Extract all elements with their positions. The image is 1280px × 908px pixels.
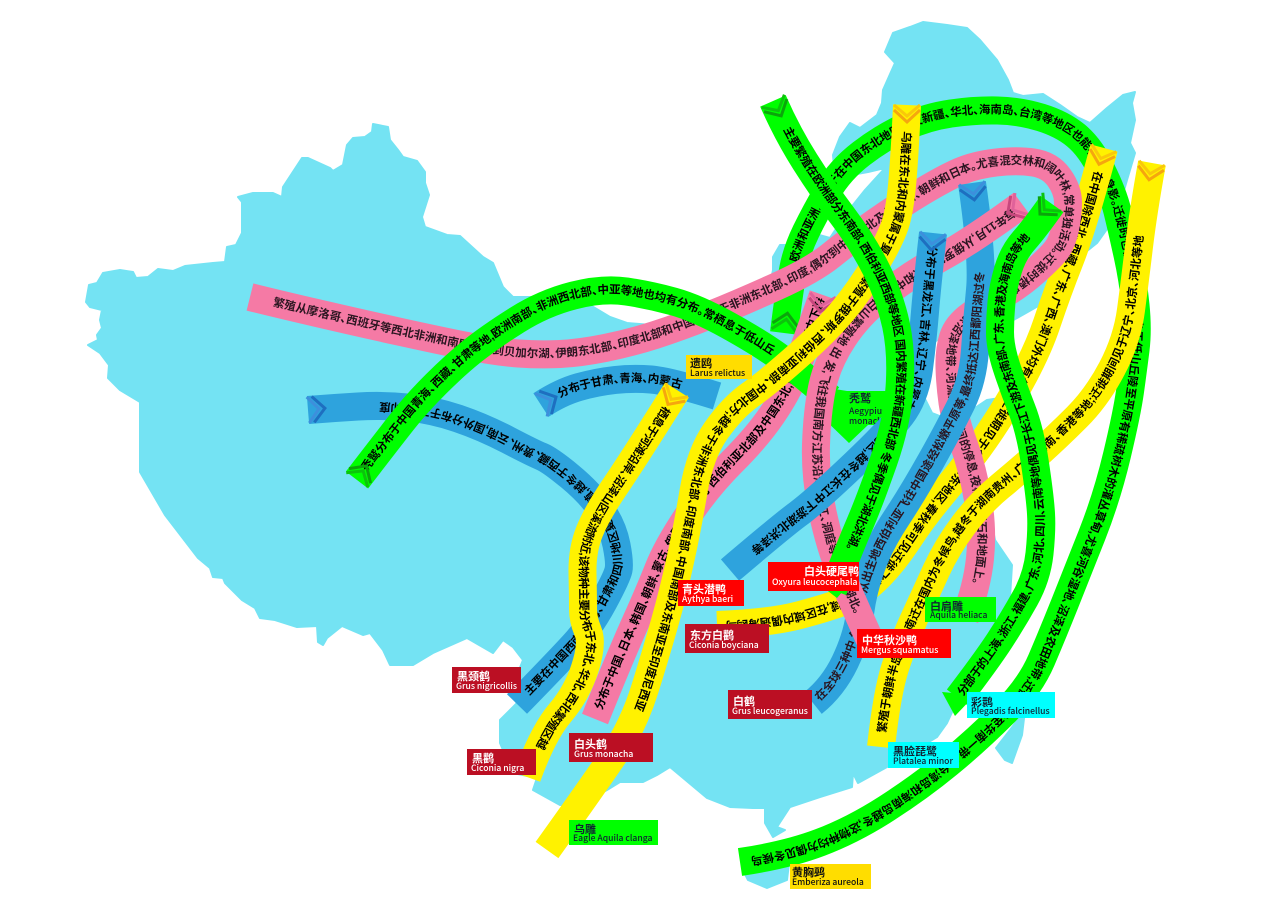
label: Eagle Aquila clanga: 乌雕	[574, 821, 596, 837]
label: Ciconia nigra: 黑鹳	[472, 750, 494, 766]
band: Oxyura leucocephala route	[760, 94, 914, 598]
label: Ciconia boyciana: 东方白鹳	[690, 627, 734, 643]
band: Aegypius monachus route and label	[346, 276, 892, 488]
band: Aythya baeri route: 分布于黑龙江、吉林、辽宁、内蒙古东部等地区,越冬在长江中下游湖北洪泽等	[752, 246, 938, 556]
label: Grus leucogeranus	[728, 690, 812, 719]
band: Aegypius monachus route and label: 秃鹫	[849, 390, 871, 406]
label: Grus monacha: Grus monacha	[574, 748, 633, 760]
label: Aquila heliaca: 白肩雕	[930, 598, 963, 614]
label: Eagle Aquila clanga: Eagle Aquila clanga	[573, 832, 653, 844]
label: Mergus squamatus: Mergus squamatus	[861, 644, 938, 656]
label: Larus relictus: Larus relictus	[690, 367, 745, 379]
band: Emberiza aureola route: 欧洲和亚洲,少见于在中国东北地区以及新疆、华北、海南岛、台湾等地区也能看到其身影。迁徙时也偶见于此常栖息于低山丘陵至平原有稀疏树木的灌丛草甸,尤喜河谷湿地、沼泽及农田地带,迁徙冬季至华南一带,在台湾岛和海南岛越冬,这物种均为偶见冬候鸟	[752, 104, 1144, 866]
band: Oxyura leucocephala route: 主要繁殖在欧洲部分东南部、西伯利亚西部等地区 国内繁殖在新疆西北部 冬季偶见于湖北洪湖。	[783, 126, 908, 548]
band: Aquila clanga route	[536, 104, 921, 858]
label: Plegadis falcinellus	[967, 692, 1055, 718]
label: Oxyura leucocephala	[768, 562, 859, 591]
label: Grus leucogeranus: 白鹤	[733, 693, 755, 709]
band: Aegypius monachus route and label: monachus	[849, 415, 892, 427]
map of China	[86, 22, 1135, 888]
label: Emberiza aureola: Emberiza aureola	[792, 876, 864, 888]
label: Larus relictus	[686, 355, 752, 379]
label: Aquila heliaca	[925, 597, 996, 622]
label: Grus nigricollis: Grus nigricollis	[456, 680, 517, 692]
label: Ciconia boyciana	[685, 624, 769, 653]
band: Larus relictus route: 分布于甘肃、青海、内蒙古	[558, 372, 682, 398]
label: Grus monacha: 白头鹤	[574, 736, 607, 752]
label: Plegadis falcinellus: 彩鹮	[971, 694, 993, 710]
label: Mergus squamatus: 中华秋沙鸭	[862, 632, 917, 648]
label: Ciconia nigra	[467, 749, 536, 775]
label: Aythya baeri	[678, 580, 744, 606]
label: Platalea minor: 黑脸琵鹭	[893, 743, 937, 759]
band: Ciconia boyciana route: 在中国除西北、西藏、广东、广西、澳门外均有分布,迁徙期见于华中华东地区,春秋季可见迁徙飞越长江流域,在区域内偶遇海鸥鸟	[726, 172, 1104, 627]
label: Ciconia boyciana: Ciconia boyciana	[689, 639, 759, 651]
label: Aquila heliaca: Aquila heliaca	[930, 609, 988, 621]
label: Oxyura leucocephala: 白头硬尾鸭	[804, 563, 859, 579]
band: Long pink route: 繁殖从摩洛哥、西班牙等西北非洲和南欧往东到贝加尔湖、伊朗东北部、印度北部和中国;越冬于非洲东北部、印度,偶尔到中国东北及俄罗斯、朝鲜和日本。尤喜混交林和阔叶林,常单独活动。迁徙时栖息于开阔草原沼泽地带、河流湖泊之间的停息,夜栖于岩石和地面上。	[273, 154, 1075, 582]
label: Platalea minor: Platalea minor	[893, 755, 953, 767]
label: Grus monacha	[569, 733, 653, 762]
label: Grus nigricollis	[452, 667, 521, 693]
label: Emberiza aureola: 黄胸鹀	[792, 864, 825, 880]
label: Larus relictus: 遗鸥	[690, 355, 712, 371]
label: Aythya baeri: Aythya baeri	[682, 593, 733, 605]
band: Aegypius monachus route and label: 秃鹫分布于中国青海、西藏、甘肃等地,欧洲南部、非洲西北部、中亚等地也均有分布。常栖息于低山丘	[360, 284, 775, 470]
label: Eagle Aquila clanga	[569, 820, 658, 845]
band: Grus leucogeranus route: 在全球三种中,每年秋季从出生地西伯利亚飞往中国途经松嫩平原等,最终抵达江西鄱阳湖过冬	[814, 272, 985, 701]
band: Ciconia nigra route: 栖息于河滩沿岸、沼泽山区溪流附近,该物种主要分布于东北、华北、西北繁殖区越	[536, 406, 671, 750]
label: Ciconia nigra: Ciconia nigra	[471, 762, 524, 774]
band: Aegypius monachus route and label: Aegypius	[849, 405, 886, 417]
label: Oxyura leucocephala: Oxyura leucocephala	[772, 576, 858, 588]
label: Emberiza aureola	[790, 864, 871, 889]
band: Plegadis falcinellus route: 分部于的上海、浙江、福建、广东、河北、四川、云南等地偶见于长江下游及东南部、广东、香港及海南岛等地	[958, 233, 1046, 696]
label: Aythya baeri: 青头潜鸭	[682, 581, 726, 597]
label: Mergus squamatus	[857, 629, 951, 658]
band: Plegadis falcinellus route	[942, 192, 1064, 716]
band: Larus relictus route	[534, 364, 722, 417]
band: Aquila clanga route: 乌雕在东北和内蒙属于夏候鸟,繁殖于俄罗斯、西伯利亚南部、中国北方;越冬于非洲东北部、印度南部、中国南部及东南亚至印度尼西亚	[634, 132, 912, 712]
band: Grus monacha route: 分布于中国、日本、韩国、朝鲜、蒙古、俄罗斯;繁殖于西伯利亚北部及中国东北,越冬于长江中下游	[594, 296, 825, 710]
band: Grus nigricollis route: 主要在中国西南、青海、甘肃和四川地区夏行繁殖,越冬于西藏、贵州、云南,国外分布于不丹、印度	[380, 402, 623, 696]
band: Grus nigricollis route	[306, 392, 633, 714]
band: Platalea minor route: 繁殖于朝鲜半岛,越冬南迁在国内为冬候鸟,越冬于湖南贵州、广东、海南、香港等地;迁徙期间见于辽宁、北京、河北等地	[876, 236, 1144, 732]
label: Grus nigricollis: 黑颈鹤	[457, 668, 490, 684]
label: Platalea minor	[888, 742, 959, 768]
label: Grus leucogeranus: Grus leucogeranus	[732, 705, 808, 717]
label: Plegadis falcinellus: Plegadis falcinellus	[971, 705, 1050, 717]
band: Mergus squamatus route: 每年11月,从俄罗斯远东和中国东白山繁殖地 出 发,飞往我国南方江苏沿海、长江、洞庭等地到达湖北。	[812, 209, 1016, 613]
